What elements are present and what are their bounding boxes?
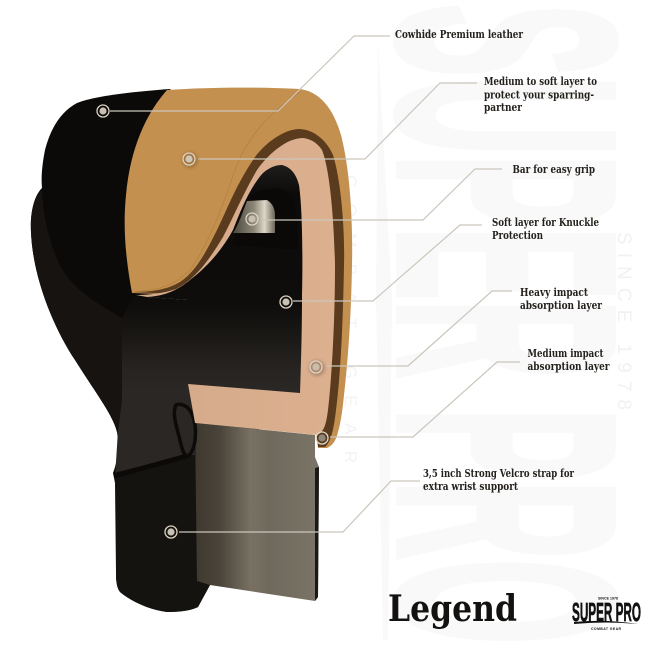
inner arch shadow [232,189,298,250]
label: medium impact absorption layer: Medium impact [528,347,604,360]
callout leader: soft layer for knuckle protection [293,225,482,301]
label: soft layer for knuckle protection: Soft layer for Knuckle [492,216,599,229]
callout leader: bar for easy grip [262,169,502,220]
label: bar for easy grip: Bar for easy grip [512,163,595,176]
label: medium impact absorption layer: absorption layer [528,360,610,373]
label: medium impact absorption layer [528,347,610,373]
marker dots [97,105,328,538]
strap loop [174,404,195,456]
callout leader: medium impact layer [330,362,520,437]
glove black silhouette [31,89,300,612]
interior dark soft layer [147,165,302,393]
label: cowhide premium leather: Cowhide Premium leather [395,28,523,41]
tan seam [133,92,300,292]
label: medium to soft layer [484,75,597,114]
callout leader: cowhide premium leather [110,36,390,111]
logo: Super Pro: COMBAT GEAR [591,627,621,631]
logo: Super Pro: SINCE 1978 [598,596,618,600]
callout leader: medium to soft layer [198,83,477,159]
wrist cuff velcro strap [113,455,210,612]
label: soft layer for knuckle protection: Protection [492,229,543,242]
lower palm [115,297,300,478]
label: heavy impact absorption layer [520,286,602,312]
heading: Legend: Legend [388,588,517,630]
label: medium to soft layer: protect your sparring- [484,88,594,102]
label: heavy impact absorption layer: absorption layer [520,299,602,312]
thumb shading [31,190,122,432]
label: velcro strap: 3,5 inch Strong Velcro strap for [423,467,574,480]
strap cut section [195,423,319,601]
label: velcro strap [423,467,574,493]
label: medium to soft layer: partner [484,101,522,114]
watermark: SUPER PRO brand lettering: SINCE 1978 [613,232,634,410]
callout leader: heavy impact layer [326,291,512,366]
label: heavy impact absorption layer: Heavy impact [520,286,589,299]
watermark: SUPER PRO brand lettering: COMBAT GEAR [341,175,360,463]
tan cowhide leather layer [125,88,352,448]
peach heavy-impact layer [136,138,335,435]
callout leader: velcro strap [179,481,420,532]
glove illustration [31,88,352,612]
label: medium to soft layer: Medium to soft layer to [484,75,597,88]
grip bar [233,200,275,233]
brown medium-impact layer [132,129,344,447]
label: soft layer for knuckle protection [492,216,599,242]
label: velcro strap: extra wrist support [423,480,519,493]
